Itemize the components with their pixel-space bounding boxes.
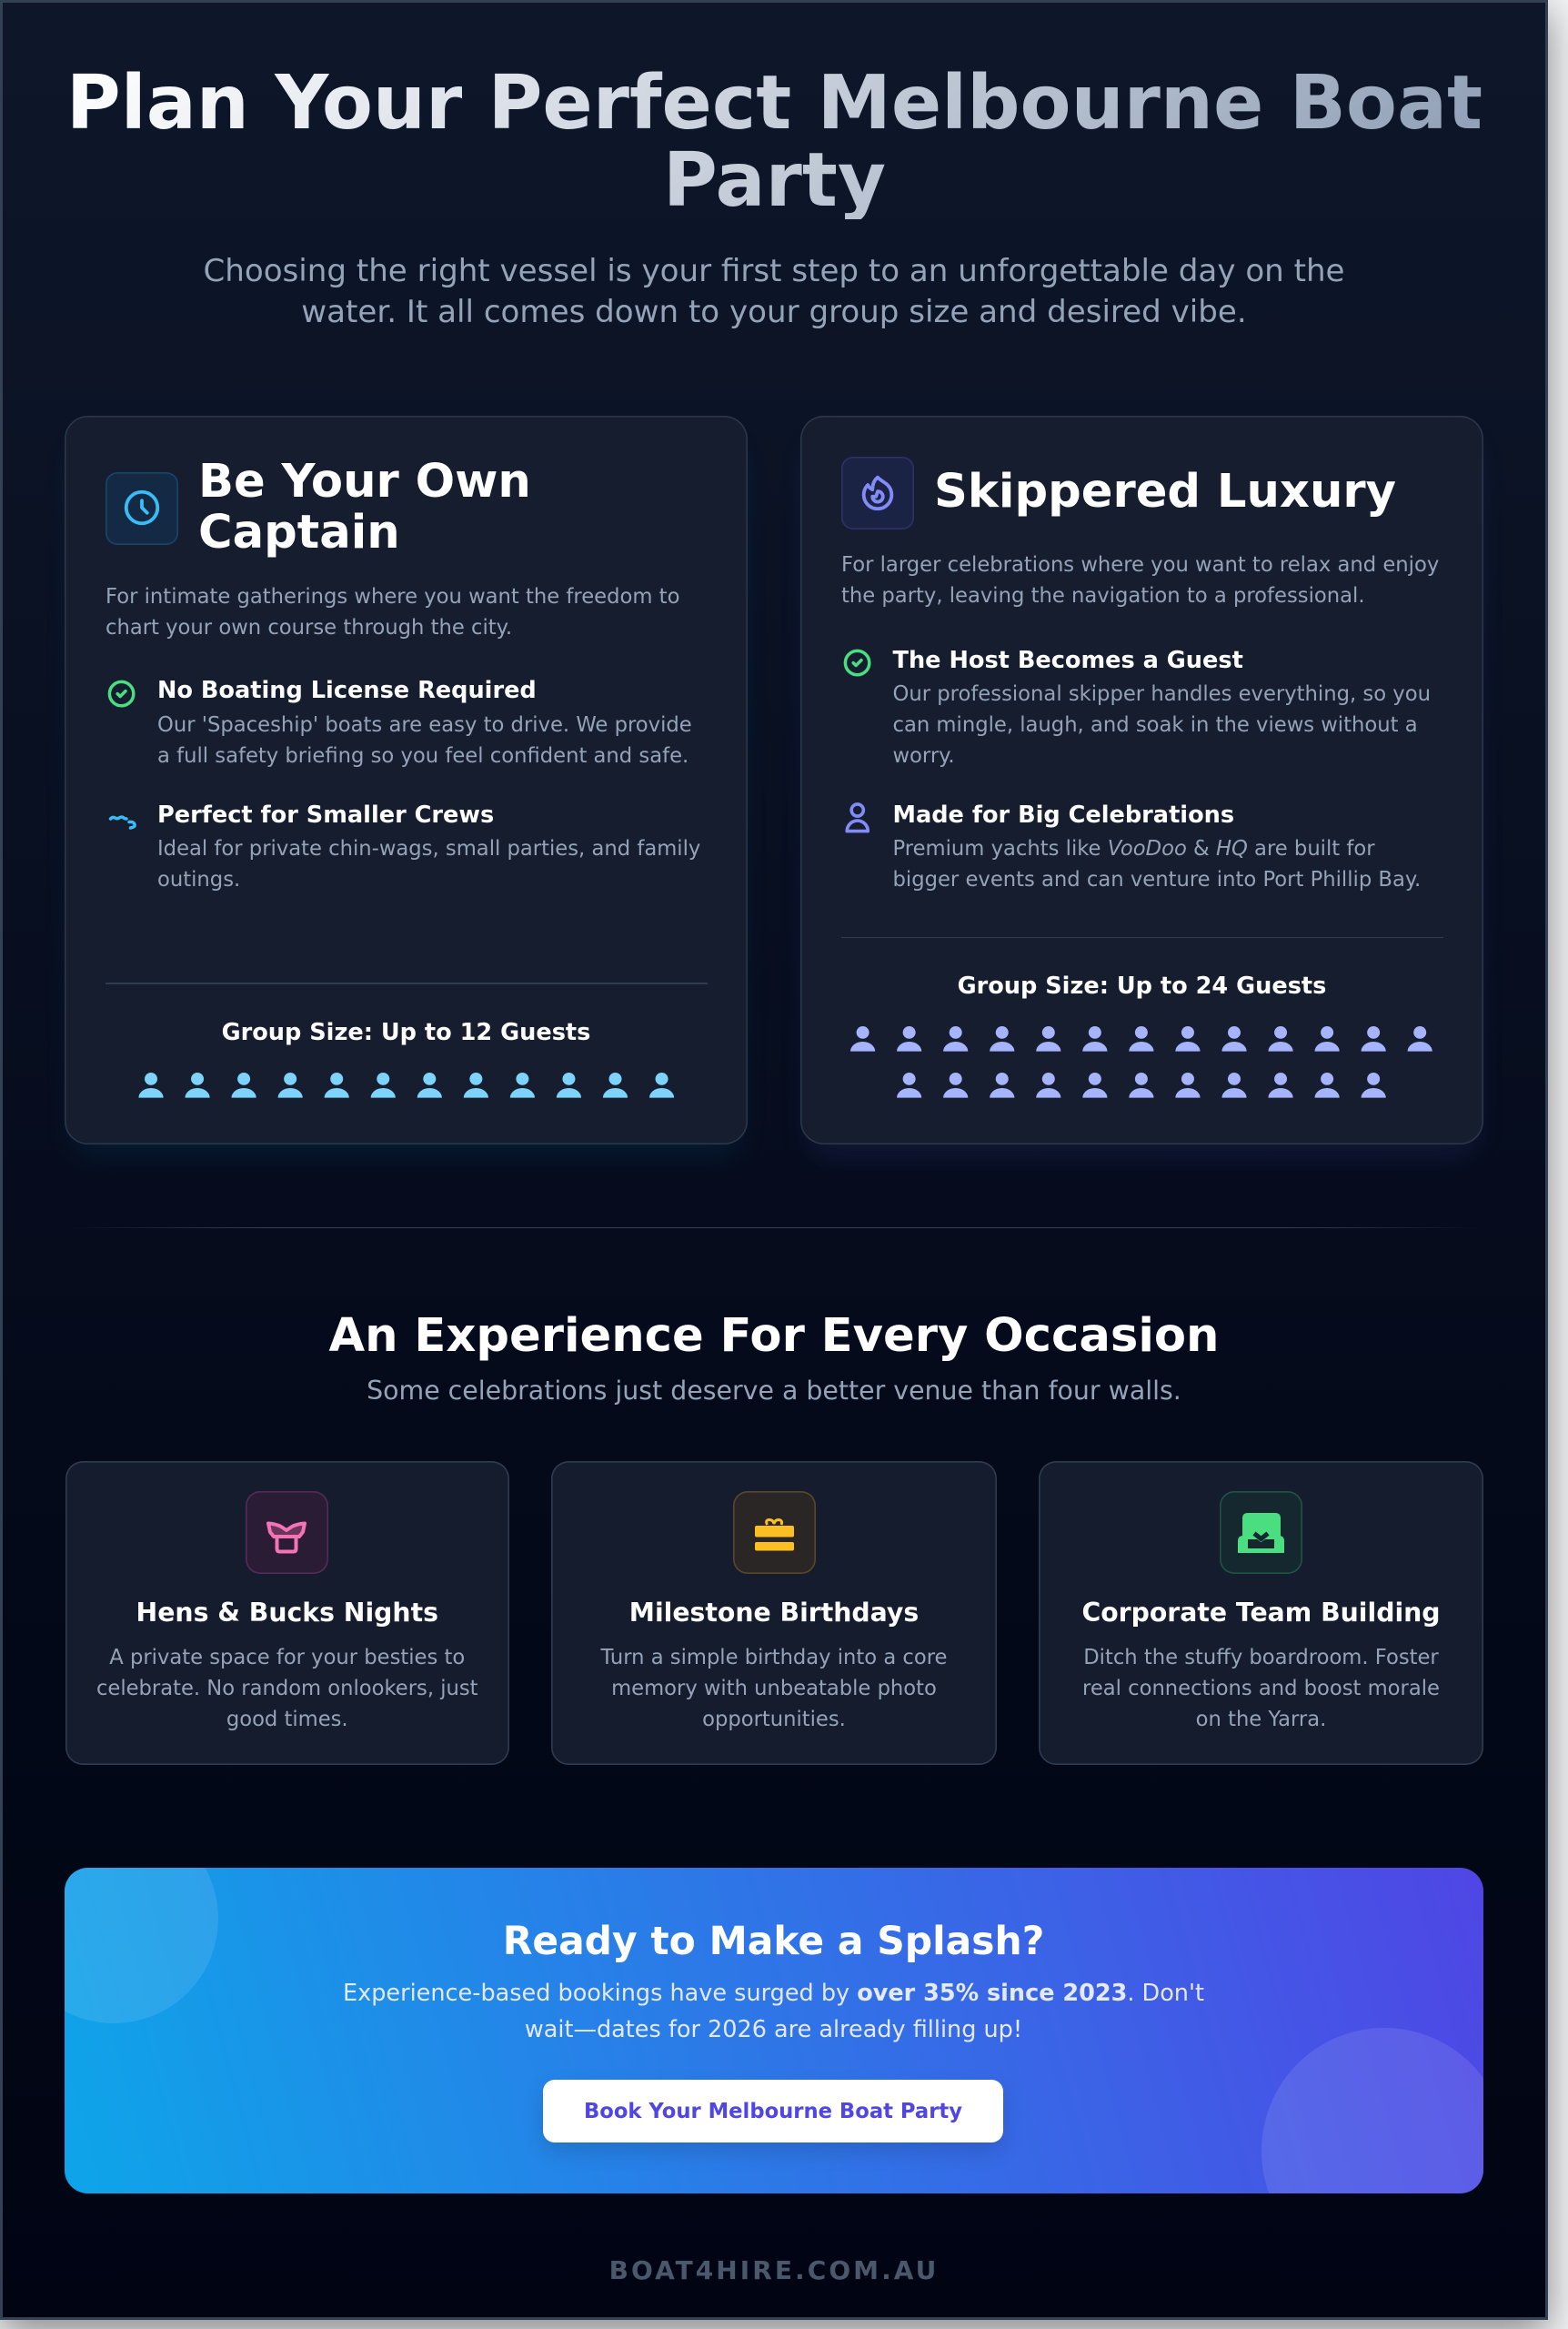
panel: be your own captain — [65, 416, 748, 1144]
icon: party top — [246, 1491, 328, 1574]
people icons: 24 guests — [850, 1026, 1432, 1098]
title: Party — [663, 136, 886, 224]
section subheading: Some celebrations just deserve a better venue than four walls. — [367, 1376, 1181, 1406]
card title: Milestone Birthdays — [629, 1598, 919, 1628]
card text: real connections and boost morale — [1082, 1677, 1440, 1700]
cta text: wait—dates for 2026 are already filling up! — [525, 2016, 1022, 2043]
feature title: Made for Big Celebrations — [893, 802, 1234, 829]
cta text — [343, 1980, 1204, 2043]
card text — [600, 1645, 947, 1731]
card heading — [198, 454, 531, 560]
feature text: Our 'Spaceship' boats are easy to drive. We provide — [157, 713, 692, 737]
panel: corporate team building — [1039, 1461, 1483, 1765]
feature text — [893, 682, 1431, 768]
card description: chart your own course through the city. — [106, 616, 512, 640]
card heading: Skippered Luxury — [934, 464, 1396, 519]
feature text: Ideal for private chin-wags, small parties, and family — [157, 837, 700, 861]
title — [64, 64, 1485, 218]
card heading: Captain — [198, 505, 400, 560]
feature text — [893, 837, 1421, 892]
feature text — [157, 713, 692, 768]
card text: good times. — [226, 1708, 348, 1731]
card text — [1082, 1645, 1440, 1731]
card description: For larger celebrations where you want to relax and enjoy — [841, 553, 1439, 577]
feature title: No Boating License Required — [157, 677, 537, 704]
icon: wave — [109, 815, 136, 830]
card text: memory with unbeatable photo — [611, 1677, 937, 1700]
feature text: bigger events and can venture into Port Phillip Bay. — [893, 868, 1421, 892]
card title: Corporate Team Building — [1081, 1598, 1441, 1628]
cta button: Book Your Melbourne Boat Party — [584, 2100, 962, 2123]
card title: Hens & Bucks Nights — [136, 1598, 438, 1628]
subtitle — [203, 253, 1345, 330]
feature text: Premium yachts like VooDoo & HQ are built for — [893, 837, 1375, 861]
panel: hens and bucks — [65, 1461, 509, 1765]
cta text: Experience-based bookings have surged by over 35% since 2023. Don't — [343, 1980, 1204, 2007]
feature: smaller crews — [109, 802, 700, 892]
icon: clock — [106, 472, 178, 545]
card text: Turn a simple birthday into a core — [601, 1645, 947, 1669]
section heading: An Experience For Every Occasion — [328, 1308, 1219, 1363]
cta button — [543, 2080, 1003, 2142]
icon: check circle — [107, 681, 136, 708]
card description — [106, 585, 679, 640]
icon: user — [845, 802, 869, 833]
icon: armchair — [1220, 1491, 1302, 1574]
title: Plan Your Perfect Melbourne Boat — [66, 60, 1483, 146]
panel: call to action — [65, 1868, 1483, 2193]
group size label: Group Size: Up to 12 Guests — [222, 1019, 590, 1046]
group size label: Group Size: Up to 24 Guests — [958, 973, 1326, 1000]
card text: opportunities. — [702, 1708, 846, 1731]
card description — [841, 553, 1439, 608]
feature title: Perfect for Smaller Crews — [157, 802, 494, 829]
footer brand: BOAT4HIRE.COM.AU — [609, 2255, 939, 2285]
feature text — [157, 837, 700, 892]
card description: the party, leaving the navigation to a professional. — [841, 584, 1365, 608]
feature: host becomes a guest — [844, 647, 1431, 768]
feature text: a full safety briefing so you feel confident and safe. — [157, 744, 689, 768]
icon: birthday cake — [733, 1491, 815, 1574]
feature text: worry. — [893, 744, 955, 768]
card text: Ditch the stuffy boardroom. Foster — [1083, 1645, 1439, 1669]
panel: milestone birthdays — [551, 1461, 997, 1765]
feature text: can mingle, laugh, and soak in the views without a — [893, 713, 1418, 737]
card heading: Be Your Own — [198, 454, 531, 509]
card text: celebrate. No random onlookers, just — [96, 1677, 478, 1700]
icon: flame — [841, 457, 914, 529]
feature text: outings. — [157, 868, 240, 892]
panel: skippered luxury — [800, 416, 1483, 1144]
cta heading: Ready to Make a Splash? — [503, 1919, 1044, 1963]
feature text: Our professional skipper handles everything, so you — [893, 682, 1431, 706]
feature: big celebrations — [845, 802, 1421, 892]
subtitle: Choosing the right vessel is your first step to an unforgettable day on the — [203, 253, 1345, 289]
subtitle: water. It all comes down to your group size and desired vibe. — [301, 294, 1247, 330]
card description: For intimate gatherings where you want the freedom to — [106, 585, 679, 609]
people icons: 12 guests — [138, 1073, 675, 1098]
card text — [96, 1645, 478, 1731]
feature: no boating license — [107, 677, 692, 768]
card text: on the Yarra. — [1196, 1708, 1326, 1731]
feature title: The Host Becomes a Guest — [893, 647, 1243, 674]
icon: check circle — [844, 650, 871, 677]
card text: A private space for your besties to — [109, 1645, 465, 1669]
